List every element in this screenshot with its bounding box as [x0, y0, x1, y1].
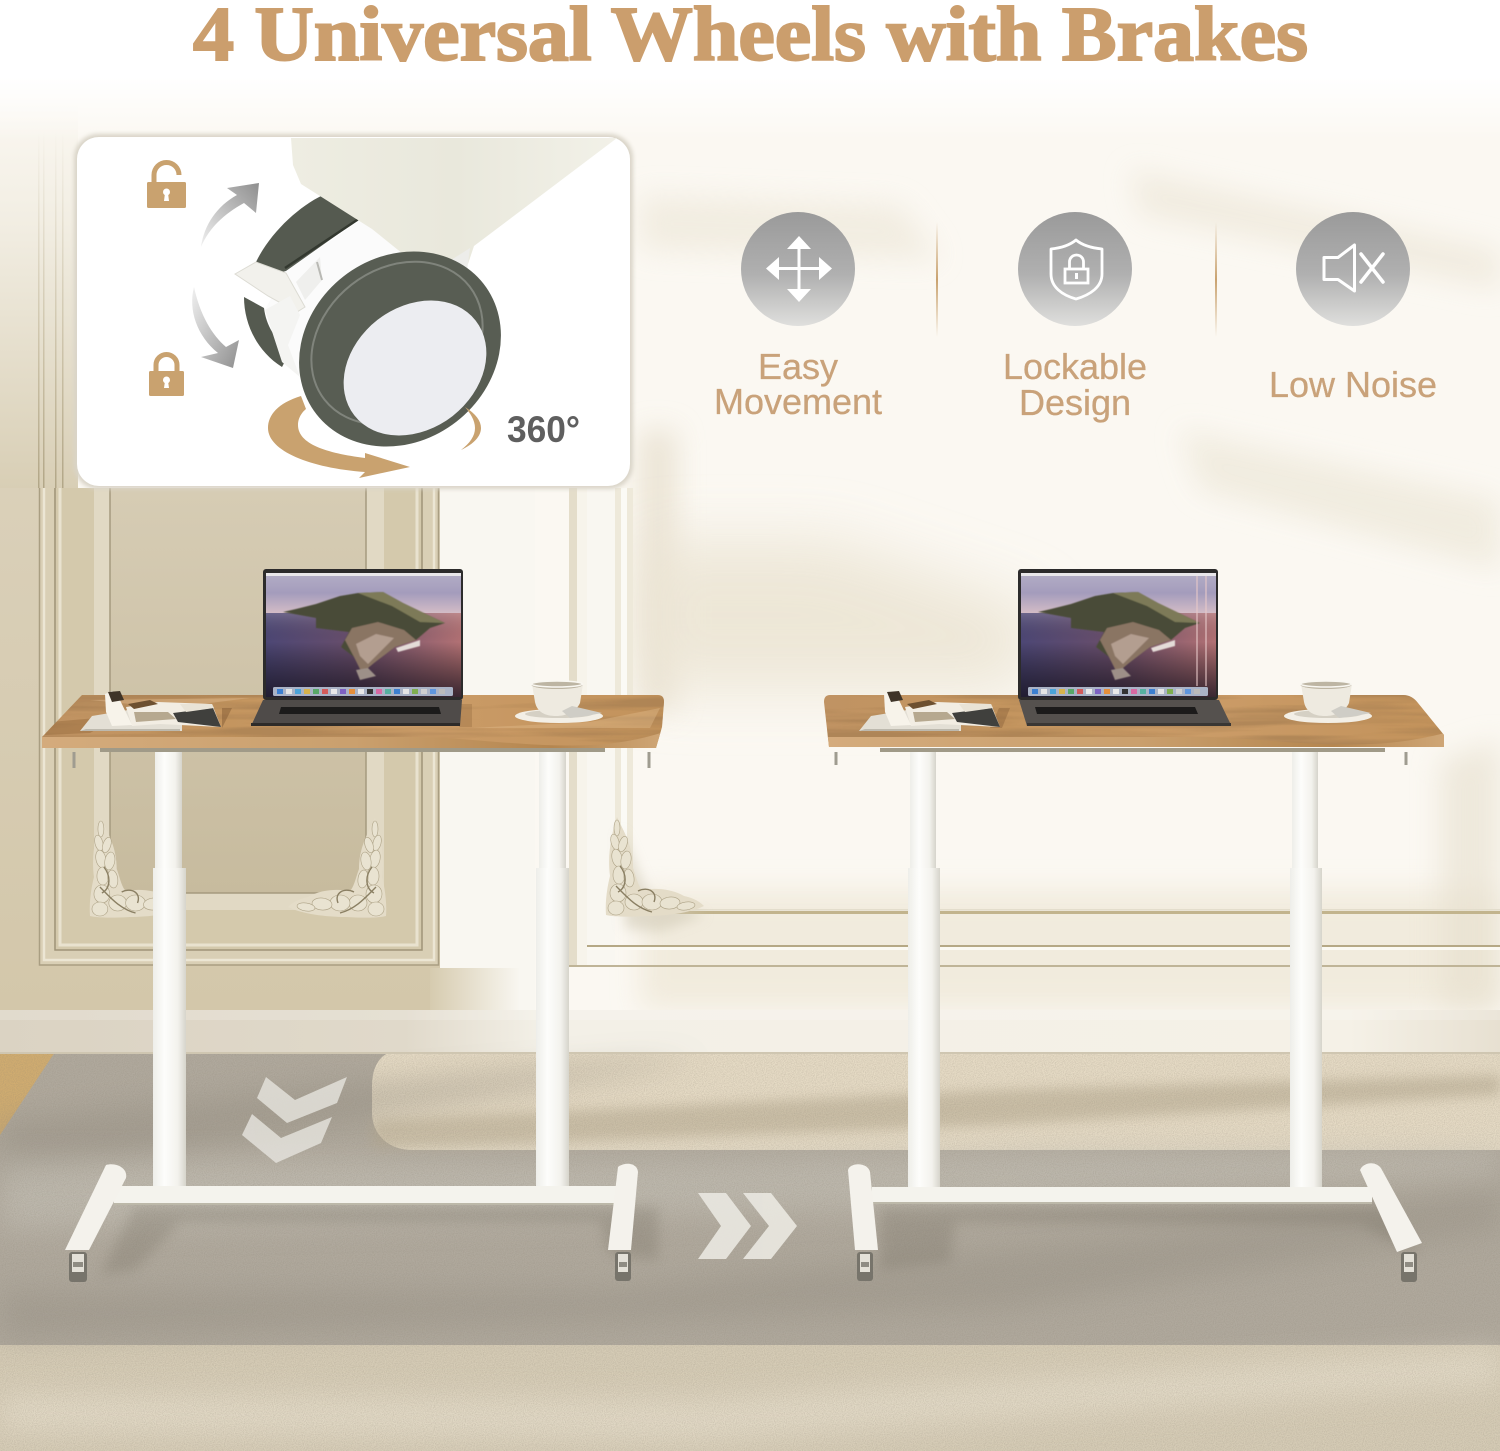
wall ornaments	[90, 817, 705, 932]
panel: caster wheel close-up	[74, 134, 633, 489]
label: easy movement: Movement	[714, 381, 882, 422]
label: lockable design: Lockable	[1003, 346, 1147, 387]
desk legs and base	[65, 750, 638, 1250]
desk shadows	[100, 1207, 1420, 1275]
label: 360 degrees: 360°	[507, 409, 580, 450]
desk: right, after moving	[820, 569, 1450, 1282]
divider	[1215, 222, 1217, 337]
icon: open padlock	[147, 162, 186, 208]
caster wheel illustration	[235, 138, 617, 487]
arrow: chevrons right	[698, 1193, 797, 1259]
feature: easy movement	[714, 212, 882, 422]
arrow: chevrons down	[242, 1077, 347, 1163]
icon: muted speaker	[1296, 212, 1410, 326]
icon: move arrows	[741, 212, 855, 326]
icon: shield lock	[1018, 212, 1132, 326]
feature: low noise	[1269, 212, 1437, 405]
floor carpet	[0, 1052, 1500, 1451]
desk legs and base	[848, 750, 1422, 1252]
wall wainscot moldings	[0, 488, 1500, 1052]
laptop	[251, 569, 463, 726]
arrow: 360 degree swivel	[268, 396, 481, 478]
label: easy movement: Easy	[758, 346, 838, 387]
open magazine	[859, 691, 1000, 731]
coffee cup and saucer	[1284, 681, 1372, 723]
ornament: center corner	[606, 817, 705, 932]
arrow: unlock rotation	[201, 183, 259, 247]
casters	[857, 1252, 1417, 1282]
ornament: right corner	[288, 818, 386, 918]
icon: closed padlock	[149, 354, 184, 396]
coffee cup and saucer	[515, 681, 603, 723]
desktop	[820, 693, 1450, 765]
divider	[936, 222, 938, 337]
desk: left, before moving	[40, 569, 670, 1282]
desktop	[40, 693, 670, 768]
open magazine	[80, 691, 221, 731]
casters	[69, 1252, 631, 1282]
label: lockable design: Design	[1019, 382, 1131, 423]
label: low noise: Low Noise	[1269, 364, 1437, 405]
laptop	[1018, 569, 1231, 726]
arrow: lock rotation	[192, 287, 239, 368]
wall background	[0, 0, 1500, 1052]
ornament: left corner	[90, 818, 187, 918]
feature: lockable design	[1003, 212, 1147, 423]
